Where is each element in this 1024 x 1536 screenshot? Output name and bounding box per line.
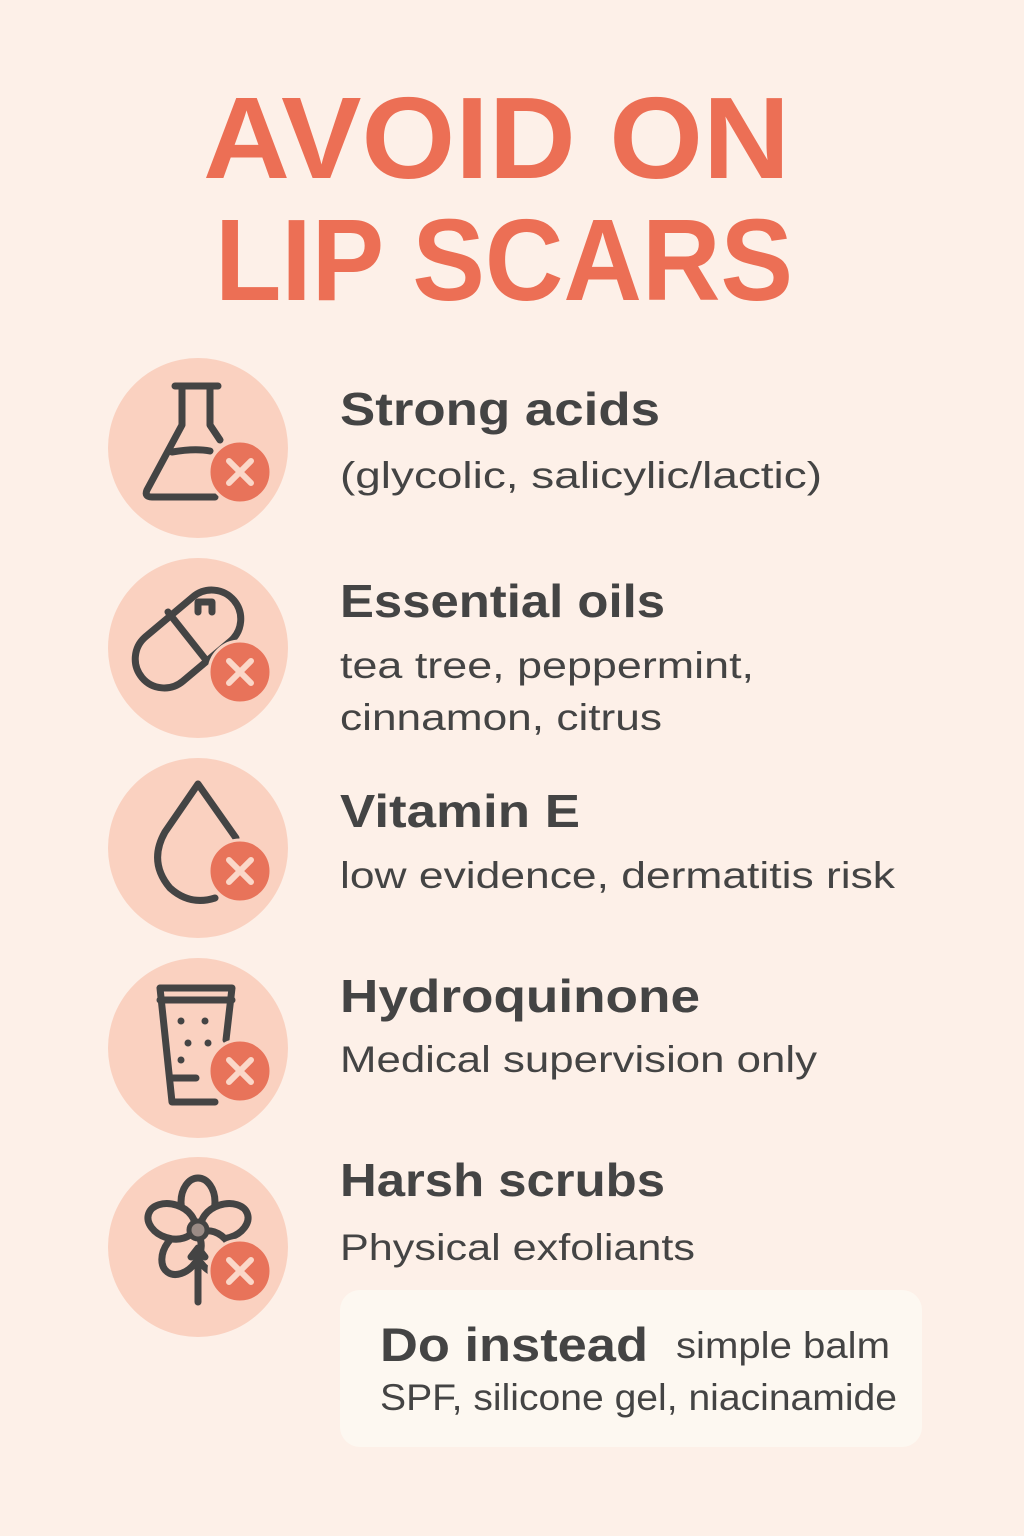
icon: drop xyxy=(108,758,288,938)
item: essential oils xyxy=(108,558,754,738)
item: harsh scrubs xyxy=(108,1154,695,1337)
description: low evidence, dermatitis risk xyxy=(340,855,896,896)
icon: capsule xyxy=(108,558,288,738)
title: LIP SCARS xyxy=(215,195,793,325)
title xyxy=(203,73,793,325)
callout: do instead: SPF, silicone gel, niacinamide xyxy=(380,1377,897,1418)
callout: do instead: simple balm xyxy=(676,1325,890,1366)
heading: Vitamin E xyxy=(340,785,580,837)
description: Medical supervision only xyxy=(340,1039,818,1080)
heading: Essential oils xyxy=(340,575,665,627)
heading: Hydroquinone xyxy=(340,970,700,1022)
description: (glycolic, salicylic/lactic) xyxy=(340,455,822,496)
item: hydroquinone xyxy=(108,958,818,1138)
title: AVOID ON xyxy=(203,73,790,203)
item: vitamin E xyxy=(108,758,896,938)
description: cinnamon, citrus xyxy=(340,697,662,738)
description: Physical exfoliants xyxy=(340,1227,695,1268)
icon: glass xyxy=(108,958,288,1138)
description: tea tree, peppermint, xyxy=(340,645,754,686)
icon: flower xyxy=(108,1157,288,1337)
heading: Strong acids xyxy=(340,383,660,435)
callout: do instead: Do instead xyxy=(380,1318,648,1371)
callout: do instead xyxy=(340,1290,922,1447)
icon: flask xyxy=(108,358,288,538)
heading: Harsh scrubs xyxy=(340,1154,665,1206)
item: strong acids xyxy=(108,358,822,538)
